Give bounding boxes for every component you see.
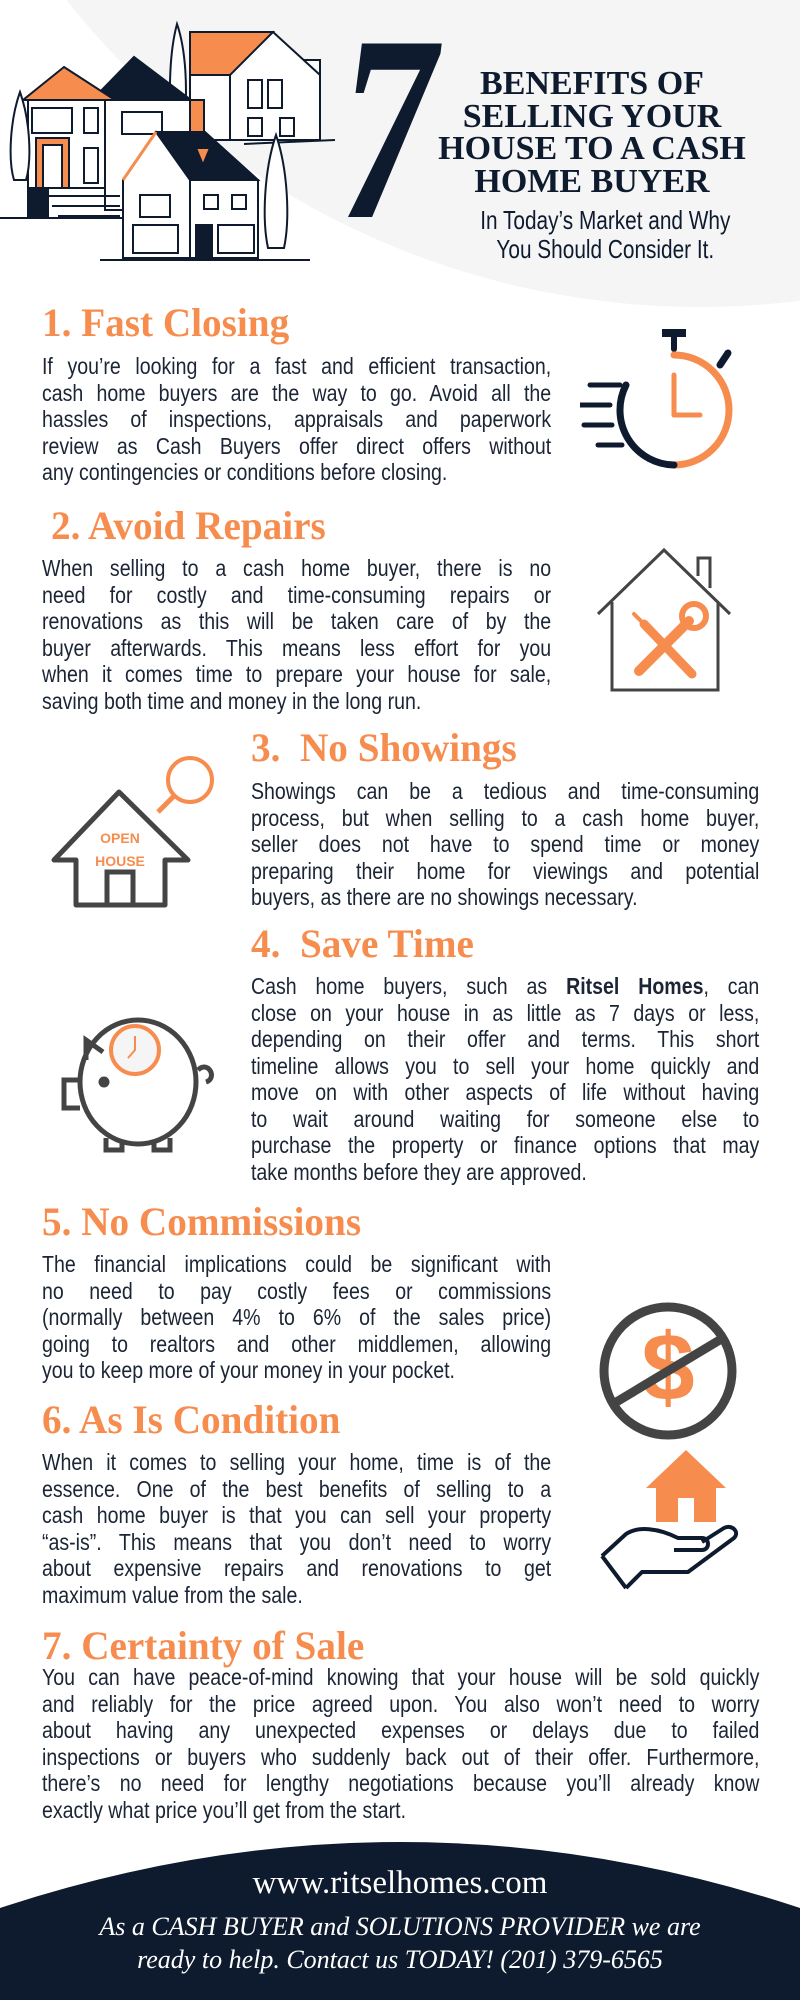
- icon: house with tools: [597, 548, 731, 692]
- title: heading text: [438, 65, 746, 200]
- section 2 text: When selling to a cash home buyer, there is no: [42, 555, 551, 581]
- section 3 heading: 3. No Showings: [251, 725, 517, 770]
- section 6 text: cash home buyer is that you can sell your property: [42, 1502, 551, 1528]
- title: heading text: BENEFITS OF: [480, 65, 704, 102]
- section 5 text: going to realtors and other middlemen, allowing: [42, 1330, 551, 1356]
- subtitle: [480, 205, 730, 264]
- section 4 text: [251, 973, 760, 1185]
- section 4 text: Cash home buyers, such as Ritsel Homes, can: [251, 973, 759, 999]
- section 1 text: cash home buyers are the way to go. Avoid all the: [42, 380, 551, 406]
- section 2 text: buyer afterwards. This means less effort for you: [42, 634, 551, 660]
- section 5 heading: 5. No Commissions: [42, 1199, 361, 1244]
- icon: open house: OPEN: [100, 830, 140, 846]
- section 1 text: review as Cash Buyers offer direct offers without: [42, 432, 551, 458]
- section 2 text: [42, 555, 551, 714]
- section 6 text: essence. One of the best benefits of selling to a: [42, 1476, 551, 1502]
- section 7 text: there’s no need for lengthy negotiations because you’ll already know: [42, 1770, 759, 1796]
- section 1 text: any contingencies or conditions before closing.: [42, 459, 447, 485]
- icon: stopwatch: [580, 329, 732, 468]
- section 7 heading: 7. Certainty of Sale: [42, 1623, 364, 1668]
- section 6 text: “as-is”. This means that you don’t need to worry: [42, 1528, 551, 1554]
- section 7 text: inspections or buyers who suddenly back out of their offer. Furthermore,: [42, 1744, 759, 1770]
- background: grey circle: [67, 0, 800, 307]
- section 2 heading: 2. Avoid Repairs: [51, 503, 326, 548]
- title: heading text: HOUSE TO A CASH: [438, 130, 746, 167]
- section 1 text: [42, 353, 552, 485]
- subtitle: You Should Consider It.: [496, 234, 714, 264]
- title: heading text: SELLING YOUR: [463, 98, 721, 134]
- section 3 text: Showings can be a tedious and time-consuming: [251, 778, 759, 804]
- section 7 text: You can have peace-of-mind knowing that your house will be sold quickly: [42, 1664, 759, 1690]
- section 4 text: close on your house in as little as 7 days or less,: [251, 1000, 759, 1026]
- section 6 text: about expensive repairs and renovations to get: [42, 1555, 551, 1581]
- section 3 text: [251, 778, 760, 910]
- subtitle: In Today’s Market and Why: [480, 205, 730, 235]
- section 3 text: process, but when selling to a cash home buyer,: [251, 804, 759, 830]
- section 5 text: (normally between 4% to 6% of the sales price): [42, 1304, 551, 1330]
- icon: open house: HOUSE: [95, 853, 145, 869]
- section 4 text: purchase the property or finance options that may: [251, 1132, 759, 1158]
- section 4 text: move on with other aspects of life without having: [251, 1079, 759, 1105]
- icon: no dollar: $: [641, 1314, 695, 1421]
- section 7 text: and reliably for the price agreed upon. You also won’t need to worry: [42, 1690, 759, 1716]
- title: heading text: HOME BUYER: [474, 162, 710, 200]
- section 6 text: [42, 1449, 552, 1608]
- section 2 text: need for costly and time-consuming repairs or: [42, 582, 551, 608]
- icon: hand holding house: [600, 1450, 738, 1590]
- footer: call to action: [98, 1912, 701, 1974]
- section 5 text: [42, 1251, 551, 1383]
- icon: no dollar: [600, 1302, 736, 1440]
- footer: [0, 1842, 800, 2000]
- section 7 text: about having any unexpected expenses or delays due to failed: [42, 1717, 759, 1743]
- section 5 text: you to keep more of your money in your pocket.: [42, 1357, 455, 1383]
- section 7 text: exactly what price you’ll get from the start.: [42, 1796, 406, 1822]
- section 4 heading: 4. Save Time: [251, 921, 474, 966]
- icon: piggy bank with clock: [62, 1018, 214, 1152]
- section 1 text: hassles of inspections, appraisals and paperwork: [42, 406, 551, 432]
- section 4 text: depending on their offer and terms. This short: [251, 1026, 759, 1052]
- section 6 text: maximum value from the sale.: [42, 1582, 303, 1608]
- section 3 text: buyers, as there are no showings necessary.: [251, 884, 637, 910]
- icon: open house: [52, 756, 214, 908]
- section 3 text: preparing their home for viewings and potential: [251, 858, 759, 884]
- section 6 heading: 6. As Is Condition: [42, 1397, 340, 1442]
- section 7 text: [42, 1664, 760, 1823]
- section 4 text: timeline allows you to sell your home quickly and: [251, 1052, 759, 1078]
- section 5 text: The financial implications could be significant with: [42, 1251, 551, 1277]
- section 1 text: If you’re looking for a fast and efficient transaction,: [42, 353, 551, 379]
- section 2 text: renovations as this will be taken care of by the: [42, 608, 551, 634]
- footer: website: www.ritselhomes.com: [253, 1865, 547, 1901]
- section 4 text: to wait around waiting for someone else to: [251, 1106, 759, 1132]
- section 4 text: take months before they are approved.: [251, 1158, 587, 1184]
- footer: call to action: As a CASH BUYER and SOLUTIONS PROVIDER we are: [99, 1912, 701, 1941]
- section 5 text: no need to pay costly fees or commissions: [42, 1278, 551, 1304]
- section 3 text: seller does not have to spend time or money: [251, 831, 759, 857]
- section 6 text: When it comes to selling your home, time is of the: [42, 1449, 551, 1475]
- section 1 heading: 1. Fast Closing: [42, 300, 289, 345]
- illustration: houses: [0, 20, 336, 261]
- section 2 text: when it comes time to prepare your house for sale,: [42, 661, 551, 687]
- footer: call to action: ready to help. Contact us TODAY! (201) 379-6565: [137, 1945, 663, 1974]
- section 2 text: saving both time and money in the long run.: [42, 688, 421, 714]
